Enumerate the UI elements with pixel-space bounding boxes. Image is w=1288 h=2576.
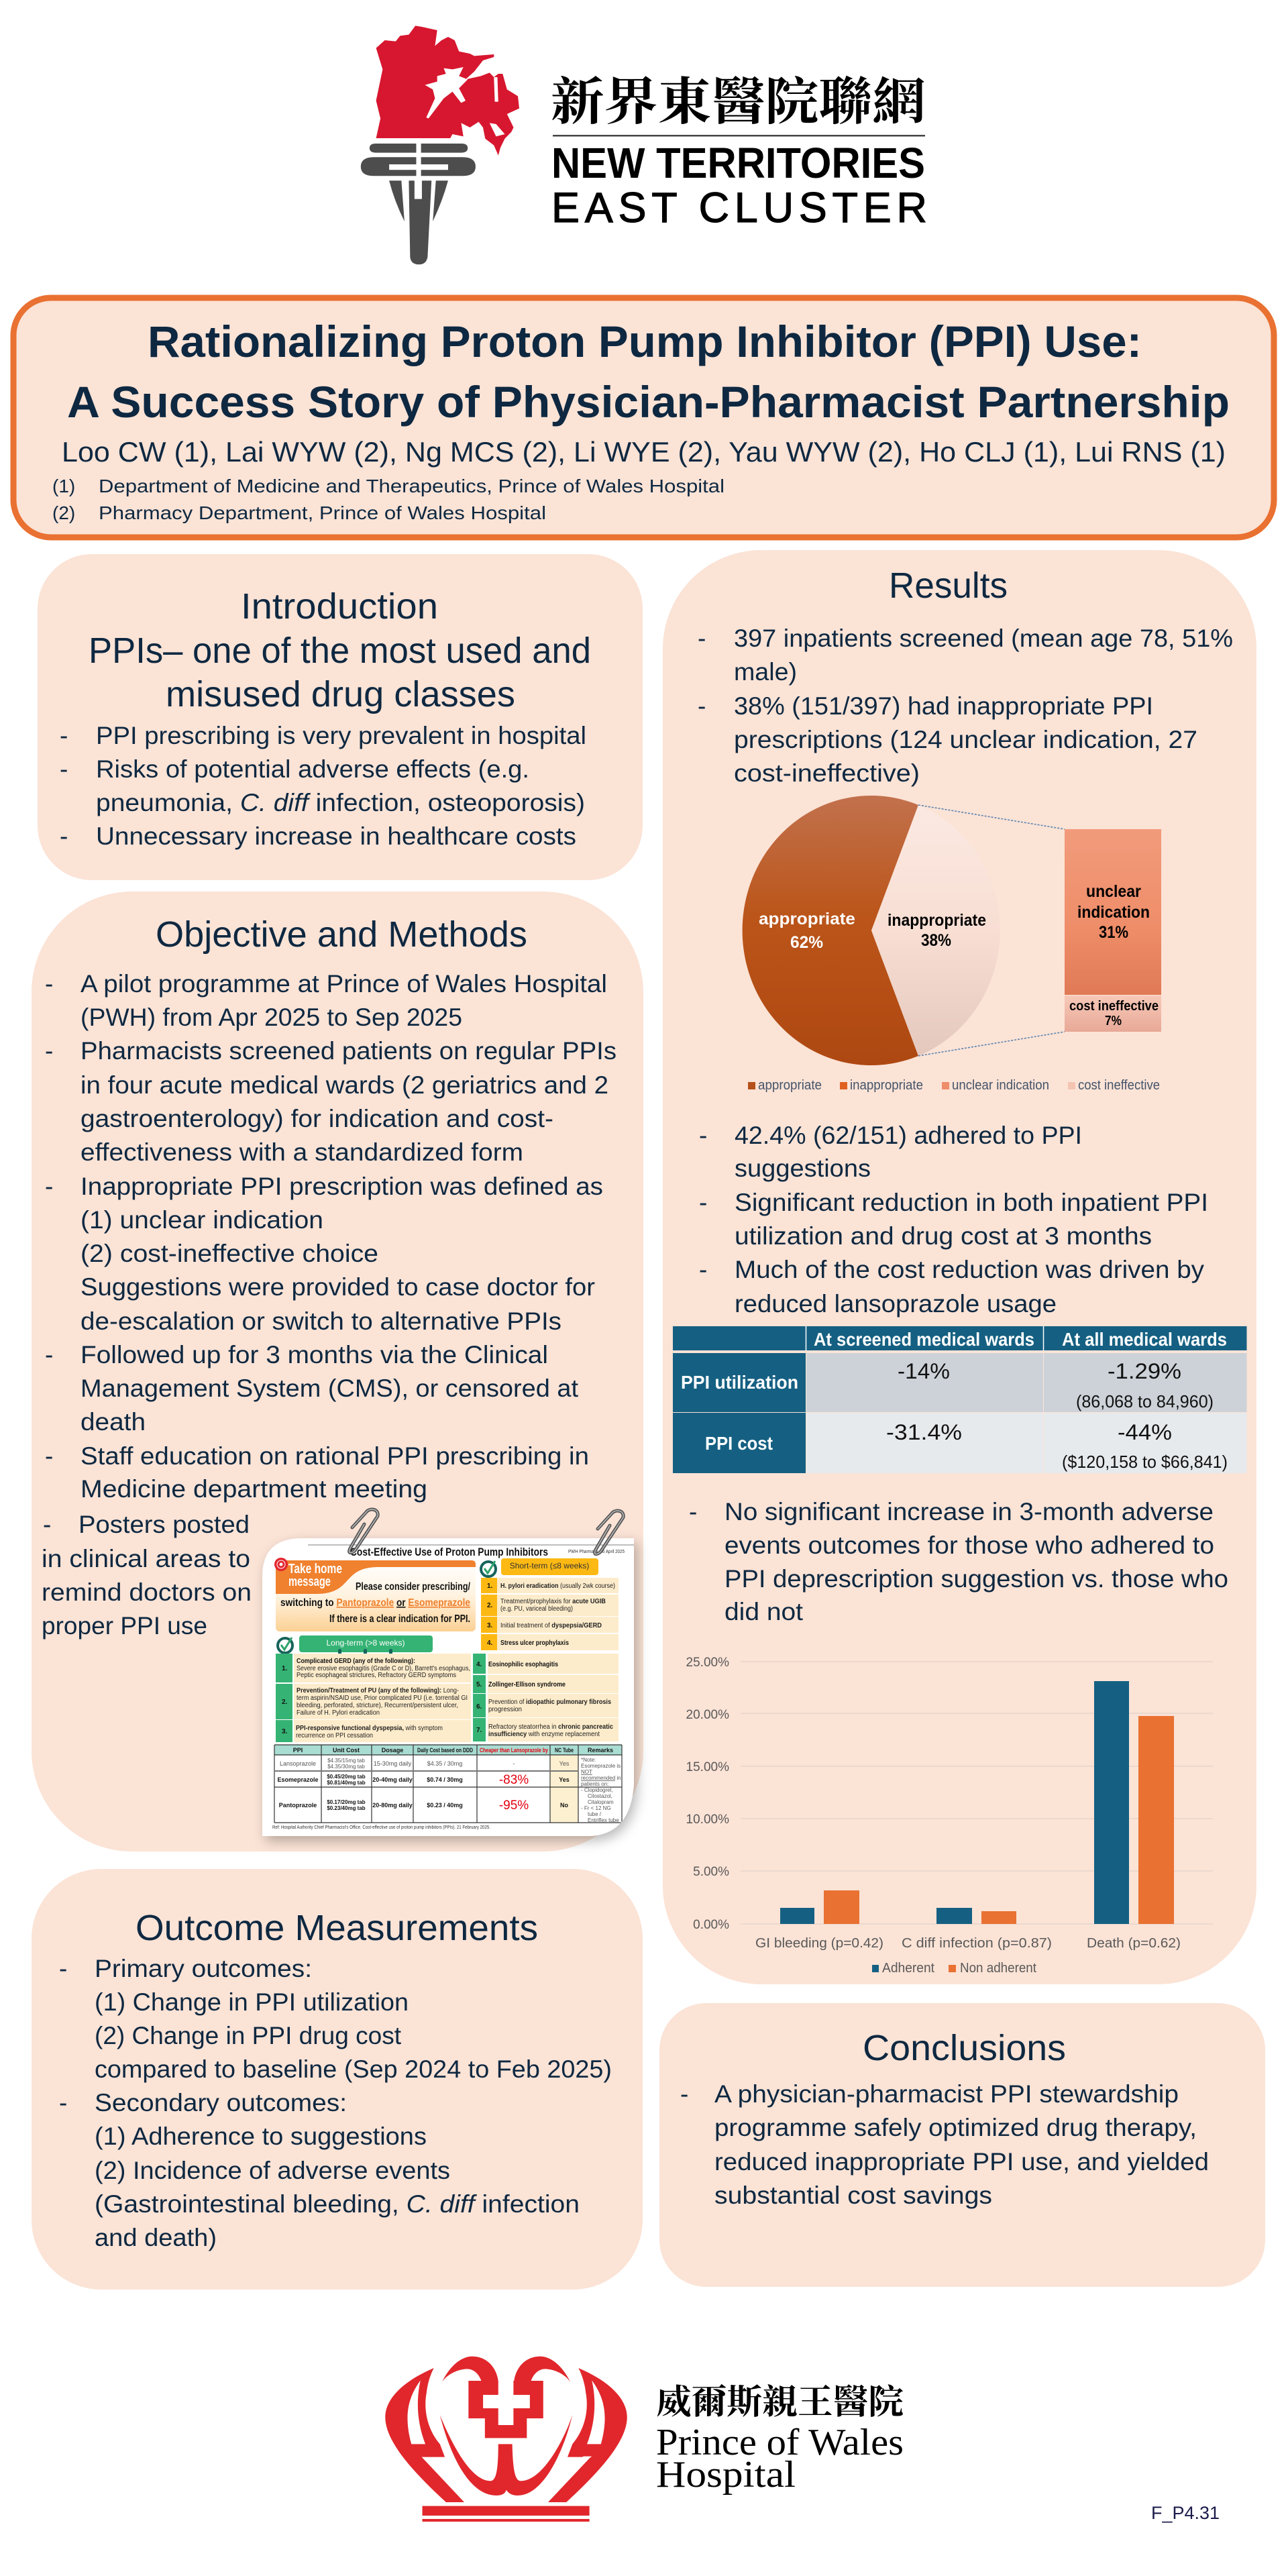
table: PPI utilization and cost: -44% [1118, 1420, 1172, 1444]
subheading [89, 631, 591, 714]
pie labels: 31% [1099, 923, 1128, 942]
pie labels: indication [1077, 903, 1150, 922]
pie slice: appropriate 62% [743, 796, 918, 1065]
PPI cost table: PPI [293, 1747, 303, 1754]
long-term list: 2. [282, 1699, 288, 1706]
y axis labels: 10.00% [686, 1813, 729, 1827]
y axis labels: 15.00% [686, 1760, 729, 1774]
methods bullets: Staff education on rational PPI prescribing in [80, 1442, 589, 1470]
results bullets: adherence and reduction: - [699, 1189, 707, 1216]
table: PPI utilization and cost: ($120,158 to $66,841) [1062, 1452, 1228, 1472]
conclusion bullet [680, 2080, 1209, 2209]
results bullets: adherence and reduction [699, 1122, 1208, 1318]
pie labels: 7% [1105, 1014, 1122, 1028]
long-term list: 4. [476, 1661, 482, 1668]
panel: results [663, 550, 1256, 1984]
long-term list: Eosinophilic esophagitis [488, 1661, 558, 1668]
chart legend: Non adherent [960, 1961, 1036, 1976]
methods bullets: effectiveness with a standardized form [80, 1138, 523, 1166]
PPI cost table: Lansoprazole [280, 1760, 316, 1767]
PPI cost table: Esomeprazole is [581, 1763, 621, 1769]
methods bullets: Followed up for 3 months via the Clinical [80, 1341, 548, 1368]
PPI cost table: -83% [499, 1773, 529, 1787]
PPI cost table: $4.35/30mg tab [327, 1764, 365, 1770]
title panel [13, 298, 1274, 537]
table: PPI utilization and cost: -14% [898, 1359, 950, 1383]
outcome bullets: (Gastrointestinal bleeding, C. diff infection [95, 2190, 580, 2218]
results bullets: adherence and reduction: reduced lansoprazole usage [735, 1290, 1057, 1318]
long-term list: Long-term (>8 weeks) [326, 1638, 405, 1648]
outcome bullets: (2) Incidence of adverse events [95, 2157, 450, 2184]
conclusion bullet: programme safely optimized drug therapy, [714, 2114, 1197, 2141]
conclusion bullet: - [680, 2080, 688, 2108]
pie labels: unclear [1086, 882, 1141, 901]
results bullets: screening: male) [734, 658, 797, 686]
introduction bullets: - [60, 755, 68, 783]
pie legend [748, 1078, 1160, 1093]
heading: objective and methods: Objective and Methods [156, 914, 527, 955]
PPI cost table: *Note: [581, 1757, 596, 1763]
outcome bullets: (2) Change in PPI drug cost [95, 2022, 402, 2049]
results bullet: adverse events: did not [724, 1598, 804, 1625]
PPI cost table: 20-80mg daily [372, 1802, 413, 1809]
long-term list: Refractory steatorrhea in chronic pancreatic [488, 1723, 613, 1731]
long-term list: 7. [476, 1727, 482, 1734]
long-term list [276, 1635, 619, 1742]
take home message box: Please consider prescribing/ [356, 1581, 470, 1593]
results bullets: adherence and reduction: - [699, 1122, 707, 1149]
pie labels [759, 882, 1159, 1028]
conclusion bullet: A physician-pharmacist PPI stewardship [714, 2080, 1179, 2108]
short-term list: Initial treatment of dyspepsia/GERD [500, 1622, 602, 1629]
methods bullets: - [45, 970, 53, 998]
methods bullets: - [45, 1442, 53, 1470]
results bullet: adverse events: PPI deprescription suggestion vs. those who [724, 1565, 1228, 1593]
PPI cost table: - Clopidogrel, [581, 1787, 613, 1793]
pie labels: appropriate [759, 910, 855, 928]
affiliations: Department of Medicine and Therapeutics, Prince of Wales Hospital [99, 476, 724, 496]
logo cluster line: EAST CLUSTER [551, 184, 927, 231]
PPI cost table: Unit Cost [333, 1747, 360, 1754]
y axis labels [686, 1656, 729, 1932]
short-term list: 4. [487, 1640, 493, 1647]
introduction bullets: Unnecessary increase in healthcare costs [96, 822, 576, 850]
panel: introduction [38, 554, 643, 880]
PPI cost table: Cheaper than Lansoprazole by [480, 1747, 548, 1754]
stacked bar: unclear indication [1065, 829, 1161, 995]
pie labels: inappropriate [888, 911, 986, 930]
results bullets: adherence and reduction: Significant reduction in both inpatient PPI [735, 1189, 1208, 1216]
take home message box: If there is a clear indication for PPI. [329, 1613, 470, 1625]
affiliations: (1) [52, 476, 75, 496]
PPI cost table: $0.74 / 30mg [427, 1776, 463, 1783]
take home message box [274, 1558, 476, 1631]
logo Chinese name: 新界東醫院聯網 [551, 61, 926, 134]
long-term list: 3. [282, 1728, 288, 1735]
methods bullets: Inappropriate PPI prescription was defined as [80, 1173, 603, 1200]
methods bullets: in clinical areas to [42, 1545, 250, 1572]
bars: GI bleeding [780, 1890, 859, 1924]
poster reference line: Ref: Hospital Authority Chief Pharmacist's Office. Cost-effective use of proton pump inhibitors (PPIs). 21 February 2025. [272, 1825, 490, 1830]
table: PPI utilization and cost [673, 1326, 1246, 1473]
results bullets: screening [698, 625, 1233, 787]
PPI cost table: $4.35 / 30mg [427, 1760, 462, 1767]
introduction bullets: pneumonia, C. diff infection, osteoporosis) [96, 789, 585, 816]
long-term list: 6. [476, 1703, 482, 1711]
outcome bullets: compared to baseline (Sep 2024 to Feb 2025) [95, 2055, 612, 2083]
results bullets: adherence and reduction: 42.4% (62/151) adhered to PPI [735, 1122, 1082, 1149]
results bullets: screening: prescriptions (124 unclear indication, 27 [734, 726, 1197, 753]
short-term list: (e.g. PU, variceal bleeding) [500, 1605, 573, 1613]
long-term list: Peptic esophageal strictures, Refractory GERD symptoms [297, 1672, 456, 1679]
x axis labels: GI bleeding (p=0.42) [755, 1936, 883, 1951]
pie legend: cost ineffective [1078, 1078, 1160, 1093]
long-term list: PPI-responsive functional dyspepsia, with symptom [296, 1725, 443, 1732]
y axis labels: 25.00% [686, 1656, 729, 1670]
methods bullets: (1) unclear indication [80, 1206, 323, 1234]
results bullets: screening: - [698, 692, 706, 720]
methods bullets: in four acute medical wards (2 geriatrics and 2 [80, 1071, 608, 1099]
pie slice: inappropriate 38% [871, 805, 1000, 1056]
introduction bullets: Risks of potential adverse effects (e.g. [96, 755, 529, 783]
PPI cost table: $0.81/40mg tab [327, 1780, 366, 1786]
PPI cost table: Entriflex tube [588, 1817, 619, 1823]
hospital Chinese name: 威爾斯親王醫院 [656, 2374, 904, 2424]
long-term list: recurrence on PPI cessation [296, 1732, 373, 1739]
conclusion bullet: substantial cost savings [714, 2182, 992, 2209]
long-term list: insufficiency with enzyme replacement [488, 1731, 600, 1738]
take home message box: message [288, 1574, 331, 1589]
PPI cost table: -95% [499, 1799, 529, 1813]
pie of pie chart [743, 796, 1161, 1093]
poster code: F_P4.31 [1151, 2503, 1220, 2523]
results bullets: adherence and reduction: Much of the cost reduction was driven by [735, 1256, 1205, 1283]
PPI cost table: patients on: [581, 1781, 608, 1787]
y axis labels: 0.00% [693, 1918, 729, 1932]
long-term list: Zollinger-Ellison syndrome [488, 1681, 566, 1688]
results bullets: screening: 397 inpatients screened (mean age 78, 51% [734, 625, 1233, 652]
main title [67, 317, 1230, 427]
PPI cost table: NOT [581, 1769, 592, 1775]
table: PPI utilization and cost: At screened medical wards [814, 1329, 1034, 1350]
results bullets: screening: 38% (151/397) had inappropriate PPI [734, 692, 1153, 720]
chart legend: Adherent [882, 1961, 934, 1976]
hospital English name: Hospital [656, 2454, 796, 2496]
methods bullets [42, 970, 616, 1640]
affiliations [52, 476, 724, 523]
subheading: PPIs– one of the most used and [89, 631, 591, 671]
results bullets: adherence and reduction: suggestions [735, 1155, 871, 1182]
PPI cost table: Cilostazol, [588, 1793, 612, 1799]
icon: paperclip right [595, 1511, 623, 1554]
pie legend: appropriate [758, 1078, 822, 1093]
affiliations: (2) [52, 502, 75, 523]
long-term list: 5. [476, 1681, 482, 1688]
long-term list: Prevention/Treatment of PU (any of the following): Long- [297, 1687, 459, 1695]
introduction bullets [60, 722, 586, 850]
results bullet: adverse events [689, 1498, 1228, 1625]
PPI cost table: Remarks [588, 1747, 613, 1754]
pie legend: inappropriate [850, 1078, 923, 1093]
methods bullets: Suggestions were provided to case doctor for [80, 1273, 595, 1301]
x axis labels: C diff infection (p=0.87) [902, 1936, 1052, 1951]
subheading: misused drug classes [166, 674, 515, 714]
short-term list: 3. [487, 1622, 493, 1629]
results bullet: adverse events: events outcomes for those who adhered to [724, 1532, 1214, 1559]
table: PPI utilization and cost: At all medical wards [1062, 1329, 1227, 1350]
bar chart: adverse events [686, 1656, 1213, 1976]
PPI cost table: No [560, 1802, 568, 1809]
outcome bullets: and death) [95, 2224, 217, 2251]
PPI cost table: Yes [559, 1760, 570, 1767]
introduction bullets: PPI prescribing is very prevalent in hospital [96, 722, 586, 749]
methods bullets: - [45, 1341, 53, 1368]
PPI cost table: Dosage [382, 1747, 403, 1754]
take home message box: switching to Pantoprazole or Esomeprazole [280, 1597, 470, 1609]
hospital English name: Prince of Wales [656, 2422, 904, 2463]
PPI cost table: $0.23/40mg tab [327, 1805, 366, 1811]
outcome bullets [59, 1955, 612, 2251]
results bullets: screening: cost-ineffective) [734, 759, 920, 787]
pie labels: 38% [921, 931, 951, 950]
PPI cost table: $4.35/15mg tab [327, 1758, 365, 1764]
PPI cost table: - [513, 1760, 515, 1767]
PPI cost table: Pantoprazole [279, 1802, 317, 1809]
conclusion bullet: reduced inappropriate PPI use, and yielded [714, 2148, 1209, 2176]
methods bullets: Posters posted [78, 1511, 250, 1538]
heading: results: Results [889, 566, 1008, 606]
PPI cost table: $0.17/20mg tab [327, 1799, 366, 1805]
panel: outcome measurements [32, 1869, 643, 2290]
main title: Rationalizing Proton Pump Inhibitor (PPI) Use: [148, 317, 1142, 366]
methods bullets: - [45, 1037, 53, 1065]
methods bullets: - [45, 1173, 53, 1200]
methods bullets: gastroenterology) for indication and cost- [80, 1105, 553, 1132]
hospital English name [656, 2422, 904, 2496]
introduction bullets: - [60, 822, 68, 850]
results bullet: adverse events: No significant increase in 3-month adverse [724, 1498, 1214, 1525]
PPI cost table: Citalopram [588, 1799, 614, 1805]
long-term list: bleeding, perforated, stricture), Recurrent/persistent ulcer, [297, 1702, 458, 1709]
panel: conclusions [659, 2003, 1265, 2287]
panel: objective and methods [32, 892, 643, 1851]
outcome bullets: Primary outcomes: [95, 1955, 312, 1982]
PPI cost table: Daily Cost based on DDD [417, 1747, 473, 1754]
short-term list: Treatment/prophylaxis for acute UGIB [500, 1598, 606, 1605]
short-term list: Stress ulcer prophylaxis [500, 1640, 569, 1647]
outcome bullets: Secondary outcomes: [95, 2089, 347, 2116]
short-term list: 1. [487, 1582, 493, 1590]
long-term list: Severe erosive esophagitis (Grade C or D), Barrett's esophagus, [297, 1665, 470, 1672]
outcome bullets: - [59, 2089, 67, 2116]
heading: conclusions: Conclusions [863, 2028, 1066, 2068]
PPI cost table: NC Tube [555, 1747, 574, 1754]
results bullets: screening: - [698, 625, 706, 652]
results bullet: adverse events: - [689, 1498, 697, 1525]
table: PPI utilization and cost: PPI utilization [681, 1372, 798, 1393]
logo: New Territories East Cluster [361, 25, 927, 264]
icon: PWH red emblem [385, 2357, 627, 2522]
methods bullets: Management System (CMS), or censored at [80, 1375, 579, 1402]
introduction bullets: - [60, 722, 68, 749]
short-term list [481, 1558, 619, 1650]
table: PPI utilization and cost: PPI cost [705, 1433, 773, 1454]
results bullets: adherence and reduction: - [699, 1256, 707, 1283]
bars: death [1094, 1681, 1174, 1924]
clinical poster thumbnail [262, 1509, 634, 1836]
poster title: Cost-Effective Use of Proton Pump Inhibitors [350, 1546, 548, 1558]
long-term list: Failure of H. Pylori eradication [297, 1709, 380, 1717]
stacked bar: cost ineffective [1065, 996, 1161, 1032]
long-term list: term aspirin/NSAID use, Prior complicated PU (i.e. torrential GI [297, 1695, 468, 1702]
methods bullets: Pharmacists screened patients on regular PPIs [80, 1037, 616, 1065]
methods bullets: death [80, 1408, 146, 1436]
x axis labels: Death (p=0.62) [1087, 1936, 1181, 1951]
pie legend: unclear indication [952, 1078, 1049, 1093]
x axis labels [755, 1936, 1181, 1951]
long-term list: Complicated GERD (any of the following): [297, 1658, 415, 1665]
affiliations: Pharmacy Department, Prince of Wales Hospital [99, 502, 546, 523]
PPI cost table: recommended in [581, 1775, 621, 1781]
icon: torch with red New Territories map flame [361, 25, 519, 264]
long-term list: progression [488, 1706, 522, 1713]
long-term list: 1. [282, 1665, 288, 1672]
PPI cost table: Yes [559, 1776, 570, 1783]
PPI cost table: $0.45/20mg tab [327, 1774, 366, 1780]
PPI cost table: 20-40mg daily [372, 1776, 413, 1783]
methods bullets: proper PPI use [42, 1612, 207, 1640]
methods bullets: remind doctors on [42, 1578, 252, 1606]
PPI cost table: tube / [588, 1811, 602, 1817]
pie labels: 62% [790, 933, 823, 952]
PPI cost table: Esomeprazole [277, 1776, 319, 1783]
bars: C diff infection [936, 1908, 1016, 1924]
clinical poster thumbnail: PWH Pharmacy, 16 April 2025 [568, 1550, 625, 1554]
main title: A Success Story of Physician-Pharmacist Partnership [67, 377, 1230, 427]
methods bullets: Medicine department meeting [80, 1475, 427, 1503]
PPI cost table: 15-30mg daily [374, 1760, 412, 1767]
short-term list: Short-term (≤8 weeks) [510, 1561, 589, 1570]
icon: paperclip left [350, 1509, 378, 1553]
y axis labels: 20.00% [686, 1708, 729, 1722]
PPI cost table: $0.23 / 40mg [427, 1802, 463, 1809]
PPI cost table: - Fr < 12 NG [581, 1805, 611, 1811]
connector lines [918, 805, 1065, 1056]
logo English name: NEW TERRITORIES [551, 139, 925, 187]
short-term list: 2. [487, 1602, 493, 1609]
PPI cost table [274, 1745, 622, 1823]
outcome bullets: (1) Change in PPI utilization [95, 1988, 409, 2016]
methods bullets: de-escalation or switch to alternative PPIs [80, 1307, 561, 1335]
methods bullets: (PWH) from Apr 2025 to Sep 2025 [80, 1004, 462, 1031]
long-term list: Prevention of idiopathic pulmonary fibrosis [488, 1699, 611, 1706]
results bullets: adherence and reduction: utilization and drug cost at 3 months [735, 1222, 1152, 1250]
table: PPI utilization and cost: (86,068 to 84,960) [1076, 1391, 1214, 1411]
methods bullets: A pilot programme at Prince of Wales Hospital [80, 970, 607, 998]
take home message box: Take home [288, 1562, 342, 1576]
authors: Loo CW (1), Lai WYW (2), Ng MCS (2), Li WYE (2), Yau WYW (2), Ho CLJ (1), Lui RNS (1) [62, 436, 1226, 468]
y axis labels: 5.00% [693, 1865, 729, 1879]
methods bullets: - [43, 1511, 51, 1538]
table: PPI utilization and cost: -31.4% [886, 1420, 962, 1444]
pie labels: cost ineffective [1069, 999, 1159, 1014]
logo: Prince of Wales Hospital [385, 2357, 904, 2522]
heading: introduction: Introduction [241, 586, 438, 627]
methods bullets: (2) cost-ineffective choice [80, 1240, 378, 1267]
outcome bullets: (1) Adherence to suggestions [95, 2123, 427, 2150]
table: PPI utilization and cost: -1.29% [1108, 1359, 1181, 1383]
heading: outcome measurements: Outcome Measurements [136, 1908, 538, 1948]
short-term list: H. pylori eradication (usually 2wk course) [500, 1582, 615, 1590]
outcome bullets: - [59, 1955, 67, 1982]
chart legend [872, 1961, 1036, 1976]
